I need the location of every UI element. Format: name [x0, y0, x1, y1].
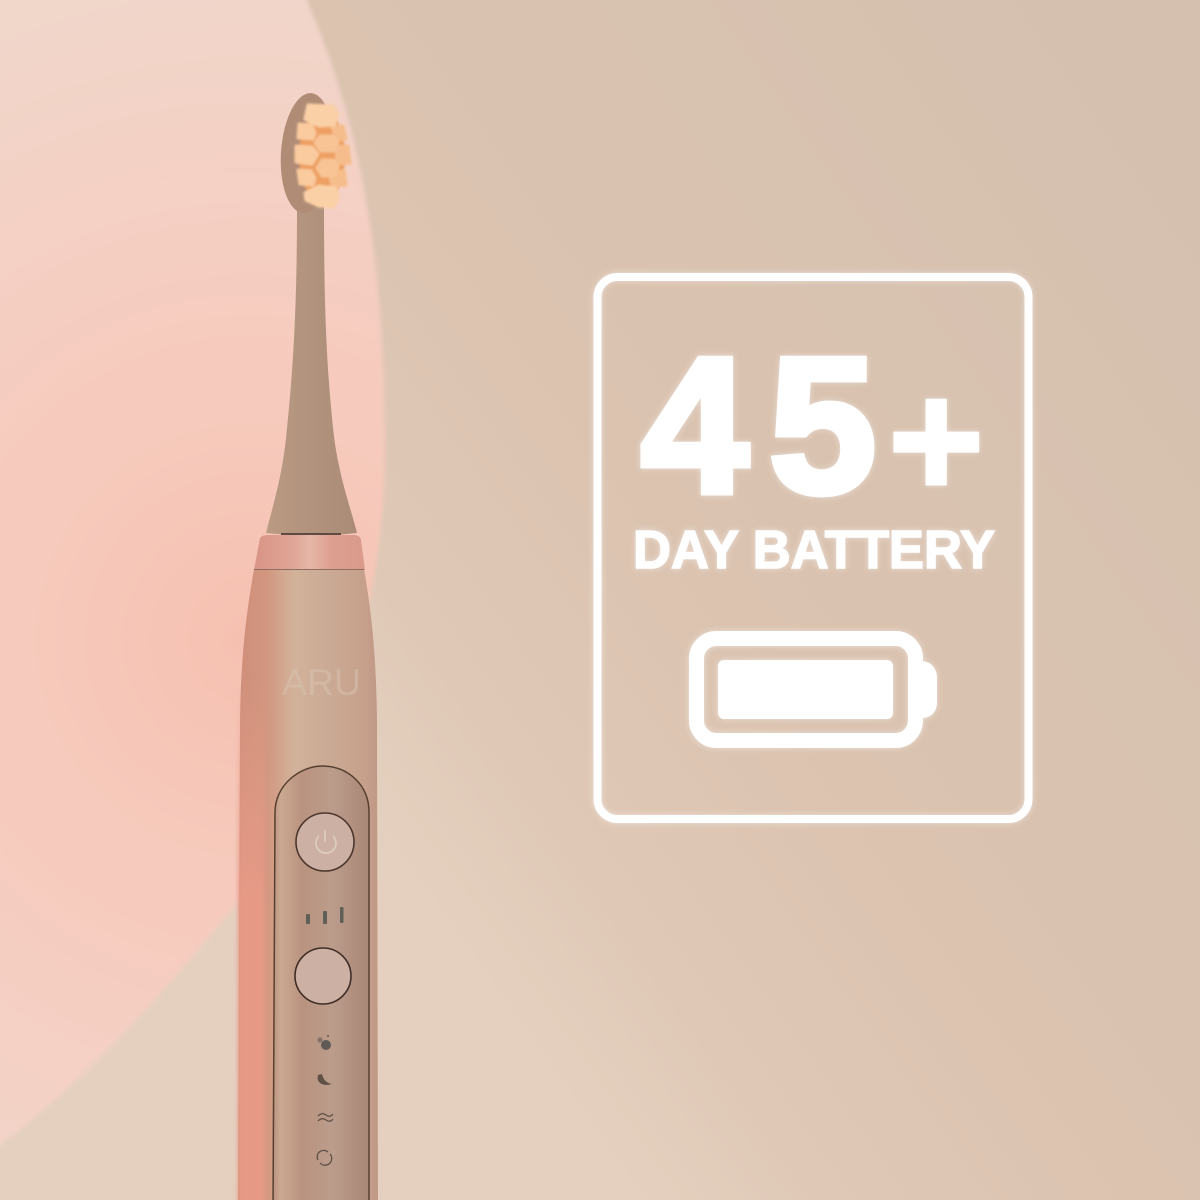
brush head [277, 91, 350, 215]
handle [238, 569, 378, 1200]
whitening icon [317, 1035, 331, 1050]
power icon [316, 830, 336, 853]
power button [296, 813, 354, 871]
pink collar [254, 535, 365, 570]
big number 45+: + [888, 348, 984, 532]
brush neck [266, 205, 357, 536]
battery icon [696, 638, 937, 740]
badge frame [598, 277, 1028, 819]
big number 45+: 4 [641, 317, 748, 533]
handle seam [254, 568, 364, 570]
pink circle of light [0, 0, 385, 1160]
battery badge [598, 277, 1028, 819]
ARU logo: ARU [282, 662, 361, 703]
sensitive icon [318, 1074, 332, 1085]
electric toothbrush [238, 91, 378, 1200]
massage icon [318, 1114, 333, 1121]
neck base ring [281, 533, 341, 536]
mode button [295, 948, 351, 1004]
clean icon [317, 1150, 332, 1165]
control panel [273, 766, 369, 1200]
bristles [296, 105, 350, 207]
day battery label: DAY BATTERY [633, 520, 995, 580]
salmon reflection strip [238, 680, 265, 1200]
bristle base [299, 110, 345, 202]
big number 45+ [641, 317, 984, 533]
big number 45+: 5 [769, 317, 876, 533]
mode bars [306, 907, 344, 924]
